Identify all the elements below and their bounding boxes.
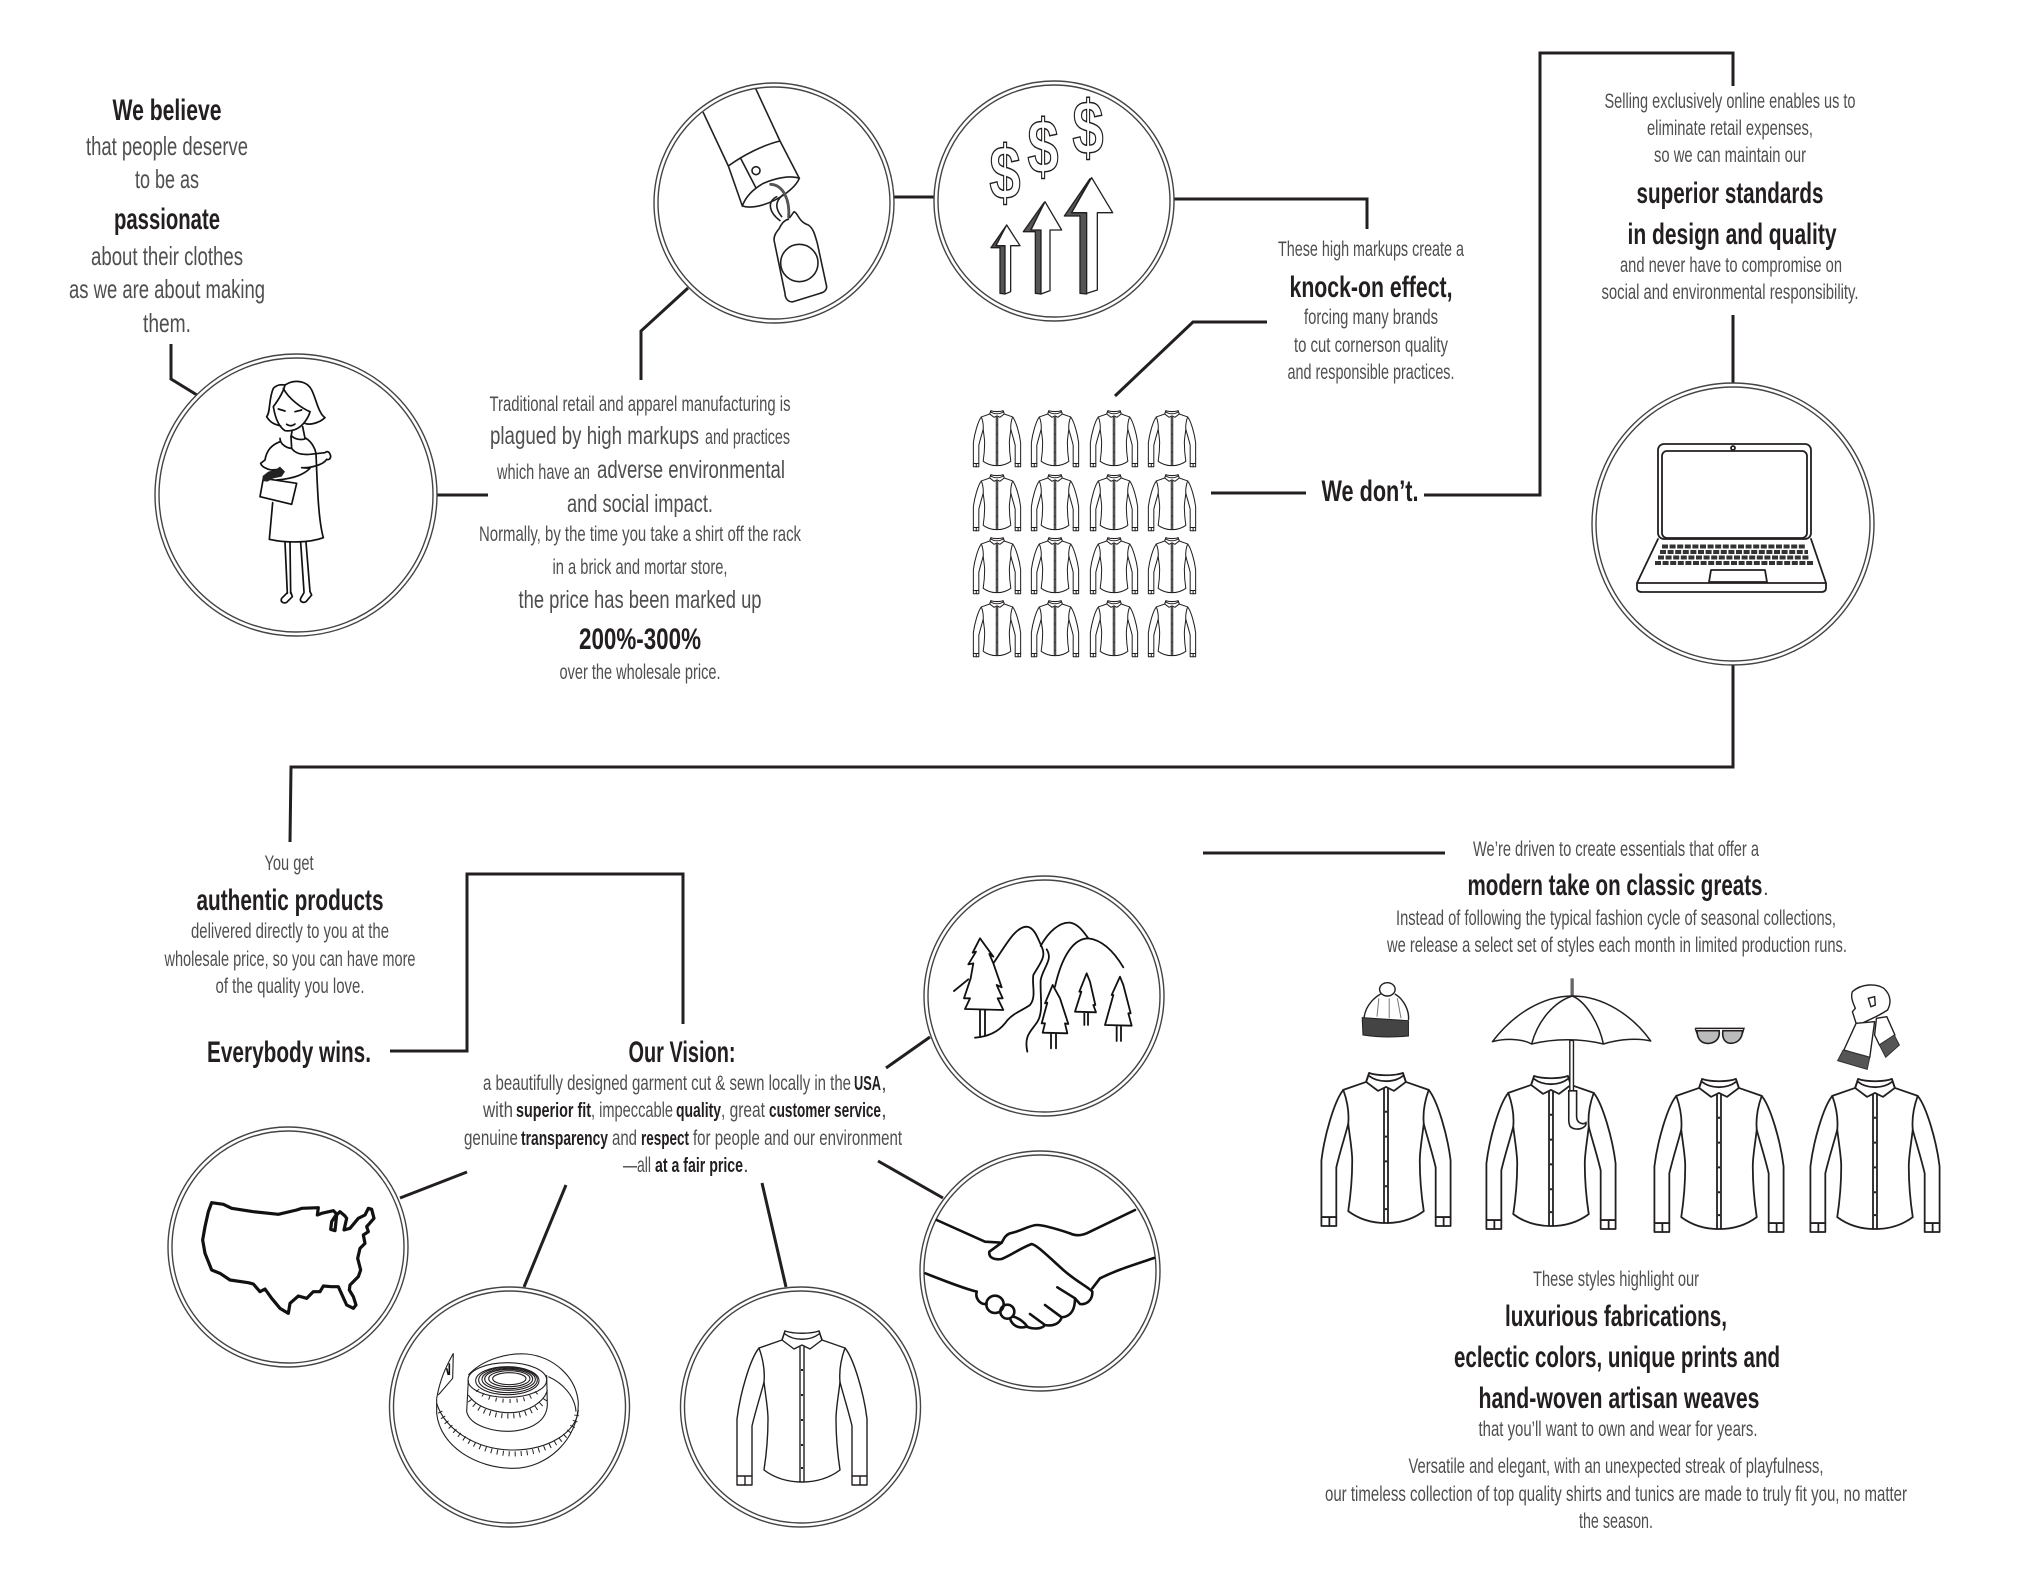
text: modern take on classic greats: Instead of following the typical fashion cycle of seasonal collections, xyxy=(1396,907,1836,930)
text: authentic products: delivered directly to you at the xyxy=(191,920,389,943)
connector: markup circle to knock-on text xyxy=(1174,199,1367,229)
text: luxurious fabrications: These styles highlight our xyxy=(1533,1268,1699,1291)
text: traditional retail and markups: in a brick and mortar store, xyxy=(552,556,728,579)
text: traditional retail and markups xyxy=(479,393,801,684)
text: traditional retail and markups: and practices xyxy=(705,426,790,449)
heading: everybody wins: Everybody wins. xyxy=(207,1036,371,1069)
text: authentic products: You get xyxy=(264,852,314,875)
text: our vision: , great xyxy=(721,1099,765,1122)
text: luxurious fabrications xyxy=(1454,1268,1780,1441)
icon grid: sixteen shirts xyxy=(973,411,1196,657)
icon circle: woman holding shirt and basket xyxy=(155,354,437,636)
text: traditional retail and markups: which have an xyxy=(496,461,590,484)
icon circle: USA map xyxy=(168,1127,408,1367)
icon circle: shirt xyxy=(680,1287,920,1527)
text: selling exclusively online: superior standards xyxy=(1636,177,1824,210)
text: knock-on effect xyxy=(1278,238,1464,384)
text: our vision: . xyxy=(743,1154,749,1177)
text: luxurious fabrications: eclectic colors, unique prints and xyxy=(1454,1341,1780,1374)
text: our vision xyxy=(464,1036,902,1177)
connector: vision to shirt circle xyxy=(762,1183,786,1287)
text: our vision: a beautifully designed garment cut & sewn locally in the xyxy=(483,1072,851,1095)
icon circle: dollar signs and rising arrows: $ xyxy=(989,132,1021,216)
text: luxurious fabrications: hand-woven artisan weaves xyxy=(1478,1382,1760,1415)
connector: online text to laptop circle xyxy=(1732,315,1734,383)
text: selling exclusively online: social and environmental responsibility. xyxy=(1602,281,1858,304)
connector: we don't to online text xyxy=(1424,53,1733,495)
illustration: four shirts with accessories xyxy=(1321,978,1940,1232)
text: our vision: with xyxy=(482,1099,513,1122)
text: selling exclusively online: so we can maintain our xyxy=(1654,144,1806,167)
text: versatile and elegant: the season. xyxy=(1579,1510,1653,1533)
text: our vision: transparency xyxy=(521,1128,609,1150)
text: selling exclusively online: Selling exclusively online enables us to xyxy=(1604,90,1856,113)
text: selling exclusively online: and never have to compromise on xyxy=(1620,254,1842,277)
text: our vision: genuine xyxy=(464,1127,518,1150)
text: modern take on classic greats: We’re driven to create essentials that offer a xyxy=(1473,838,1759,861)
icon circle: laptop xyxy=(1592,383,1874,665)
text: traditional retail and markups: Traditional retail and apparel manufacturing is xyxy=(490,393,790,416)
text: knock-on effect: knock-on effect, xyxy=(1290,271,1452,304)
connector: tag circle to markup circle xyxy=(894,196,935,198)
connector: vision to USA circle xyxy=(400,1172,467,1198)
text: traditional retail and markups: Normally, by the time you take a shirt off the rack xyxy=(479,523,801,546)
shirt with sunglasses xyxy=(1654,1028,1784,1232)
text: our vision: , impeccable xyxy=(591,1099,673,1122)
icon circle: dollar signs and rising arrows: $ xyxy=(1027,106,1059,190)
text: selling exclusively online xyxy=(1602,90,1858,304)
text: our vision: Our Vision: xyxy=(628,1036,736,1069)
connector: vision to trees circle xyxy=(886,1037,930,1068)
icon circle: sleeve with price tag xyxy=(654,83,894,323)
icon circle: handshake xyxy=(920,1151,1160,1391)
text: our vision: , xyxy=(881,1099,887,1122)
text: we believe: to be as xyxy=(135,164,199,194)
icon circle: dollar signs and rising arrows: $ xyxy=(1072,87,1104,171)
connector: modern take text rule xyxy=(1203,852,1445,854)
text: our vision: for people and our environment xyxy=(693,1127,902,1150)
text: knock-on effect: to cut cornerson quality xyxy=(1294,334,1448,357)
icon circle: mountains and trees xyxy=(924,876,1164,1116)
text: versatile and elegant: Versatile and elegant, with an unexpected streak of playfulness, xyxy=(1408,1455,1824,1478)
text: we believe: them. xyxy=(143,308,191,338)
text: our vision: —all xyxy=(623,1154,651,1177)
shirt with scarf xyxy=(1810,985,1940,1232)
shirt with umbrella xyxy=(1486,978,1651,1229)
connector: vision to tape circle xyxy=(524,1185,566,1287)
heading: we don't: We don’t. xyxy=(1322,475,1418,508)
text: we believe: We believe xyxy=(112,94,222,127)
text: selling exclusively online: eliminate retail expenses, xyxy=(1647,117,1813,140)
icon circle: measuring tape xyxy=(390,1287,630,1527)
text: knock-on effect: and responsible practices. xyxy=(1288,361,1454,384)
text: we believe: about their clothes xyxy=(91,241,243,271)
text: selling exclusively online: in design and quality xyxy=(1628,218,1837,251)
text: luxurious fabrications: luxurious fabrications, xyxy=(1505,1300,1727,1333)
text: our vision: at a fair price xyxy=(655,1155,743,1177)
text: our vision: superior fit xyxy=(516,1100,591,1122)
text: authentic products: wholesale price, so you can have more xyxy=(164,948,416,971)
text: our vision: , xyxy=(881,1072,887,1095)
text: traditional retail and markups: over the wholesale price. xyxy=(560,661,720,684)
connector: laptop circle to authentic products text xyxy=(290,665,1733,842)
text: traditional retail and markups: adverse environmental xyxy=(597,456,785,484)
text: authentic products xyxy=(164,852,416,998)
text: our vision: customer service xyxy=(769,1100,881,1122)
text: we believe xyxy=(69,94,265,338)
text: our vision: respect xyxy=(641,1128,689,1150)
connector: vision to handshake circle xyxy=(878,1161,943,1198)
text: authentic products: authentic products xyxy=(196,884,384,917)
connector: retail text to tag circle xyxy=(641,288,688,380)
text: modern take on classic greats: . xyxy=(1763,877,1769,900)
text: our vision: quality xyxy=(676,1100,722,1122)
text: our vision: and xyxy=(612,1127,637,1150)
connector: belief text to woman circle xyxy=(171,344,197,395)
text: traditional retail and markups: the price has been marked up xyxy=(518,586,762,614)
connector: woman circle to retail text xyxy=(437,494,488,496)
text: traditional retail and markups: and social impact. xyxy=(567,490,713,518)
text: we believe: as we are about making xyxy=(69,274,265,304)
connector: everybody wins to our vision xyxy=(390,874,683,1051)
text: modern take on classic greats: modern take on classic greats xyxy=(1468,869,1762,902)
text: we believe: that people deserve xyxy=(86,131,248,161)
text: modern take on classic greats xyxy=(1386,838,1847,957)
text: we believe: passionate xyxy=(114,203,220,236)
connector: shirt grid to we don't xyxy=(1211,492,1306,494)
text: traditional retail and markups: 200%-300% xyxy=(579,623,701,656)
text: authentic products: of the quality you love. xyxy=(216,975,364,998)
text: versatile and elegant xyxy=(1325,1455,1907,1533)
shirt with beanie xyxy=(1321,983,1451,1226)
text: luxurious fabrications: that you’ll want to own and wear for years. xyxy=(1478,1418,1758,1441)
connector: knock-on text to shirt grid xyxy=(1115,322,1267,396)
text: traditional retail and markups: plagued by high markups xyxy=(490,422,699,450)
text: our vision: USA xyxy=(854,1073,881,1095)
icon circle: dollar signs and rising arrows xyxy=(934,81,1174,321)
text: knock-on effect: forcing many brands xyxy=(1304,306,1438,329)
text: knock-on effect: These high markups create a xyxy=(1278,238,1464,261)
